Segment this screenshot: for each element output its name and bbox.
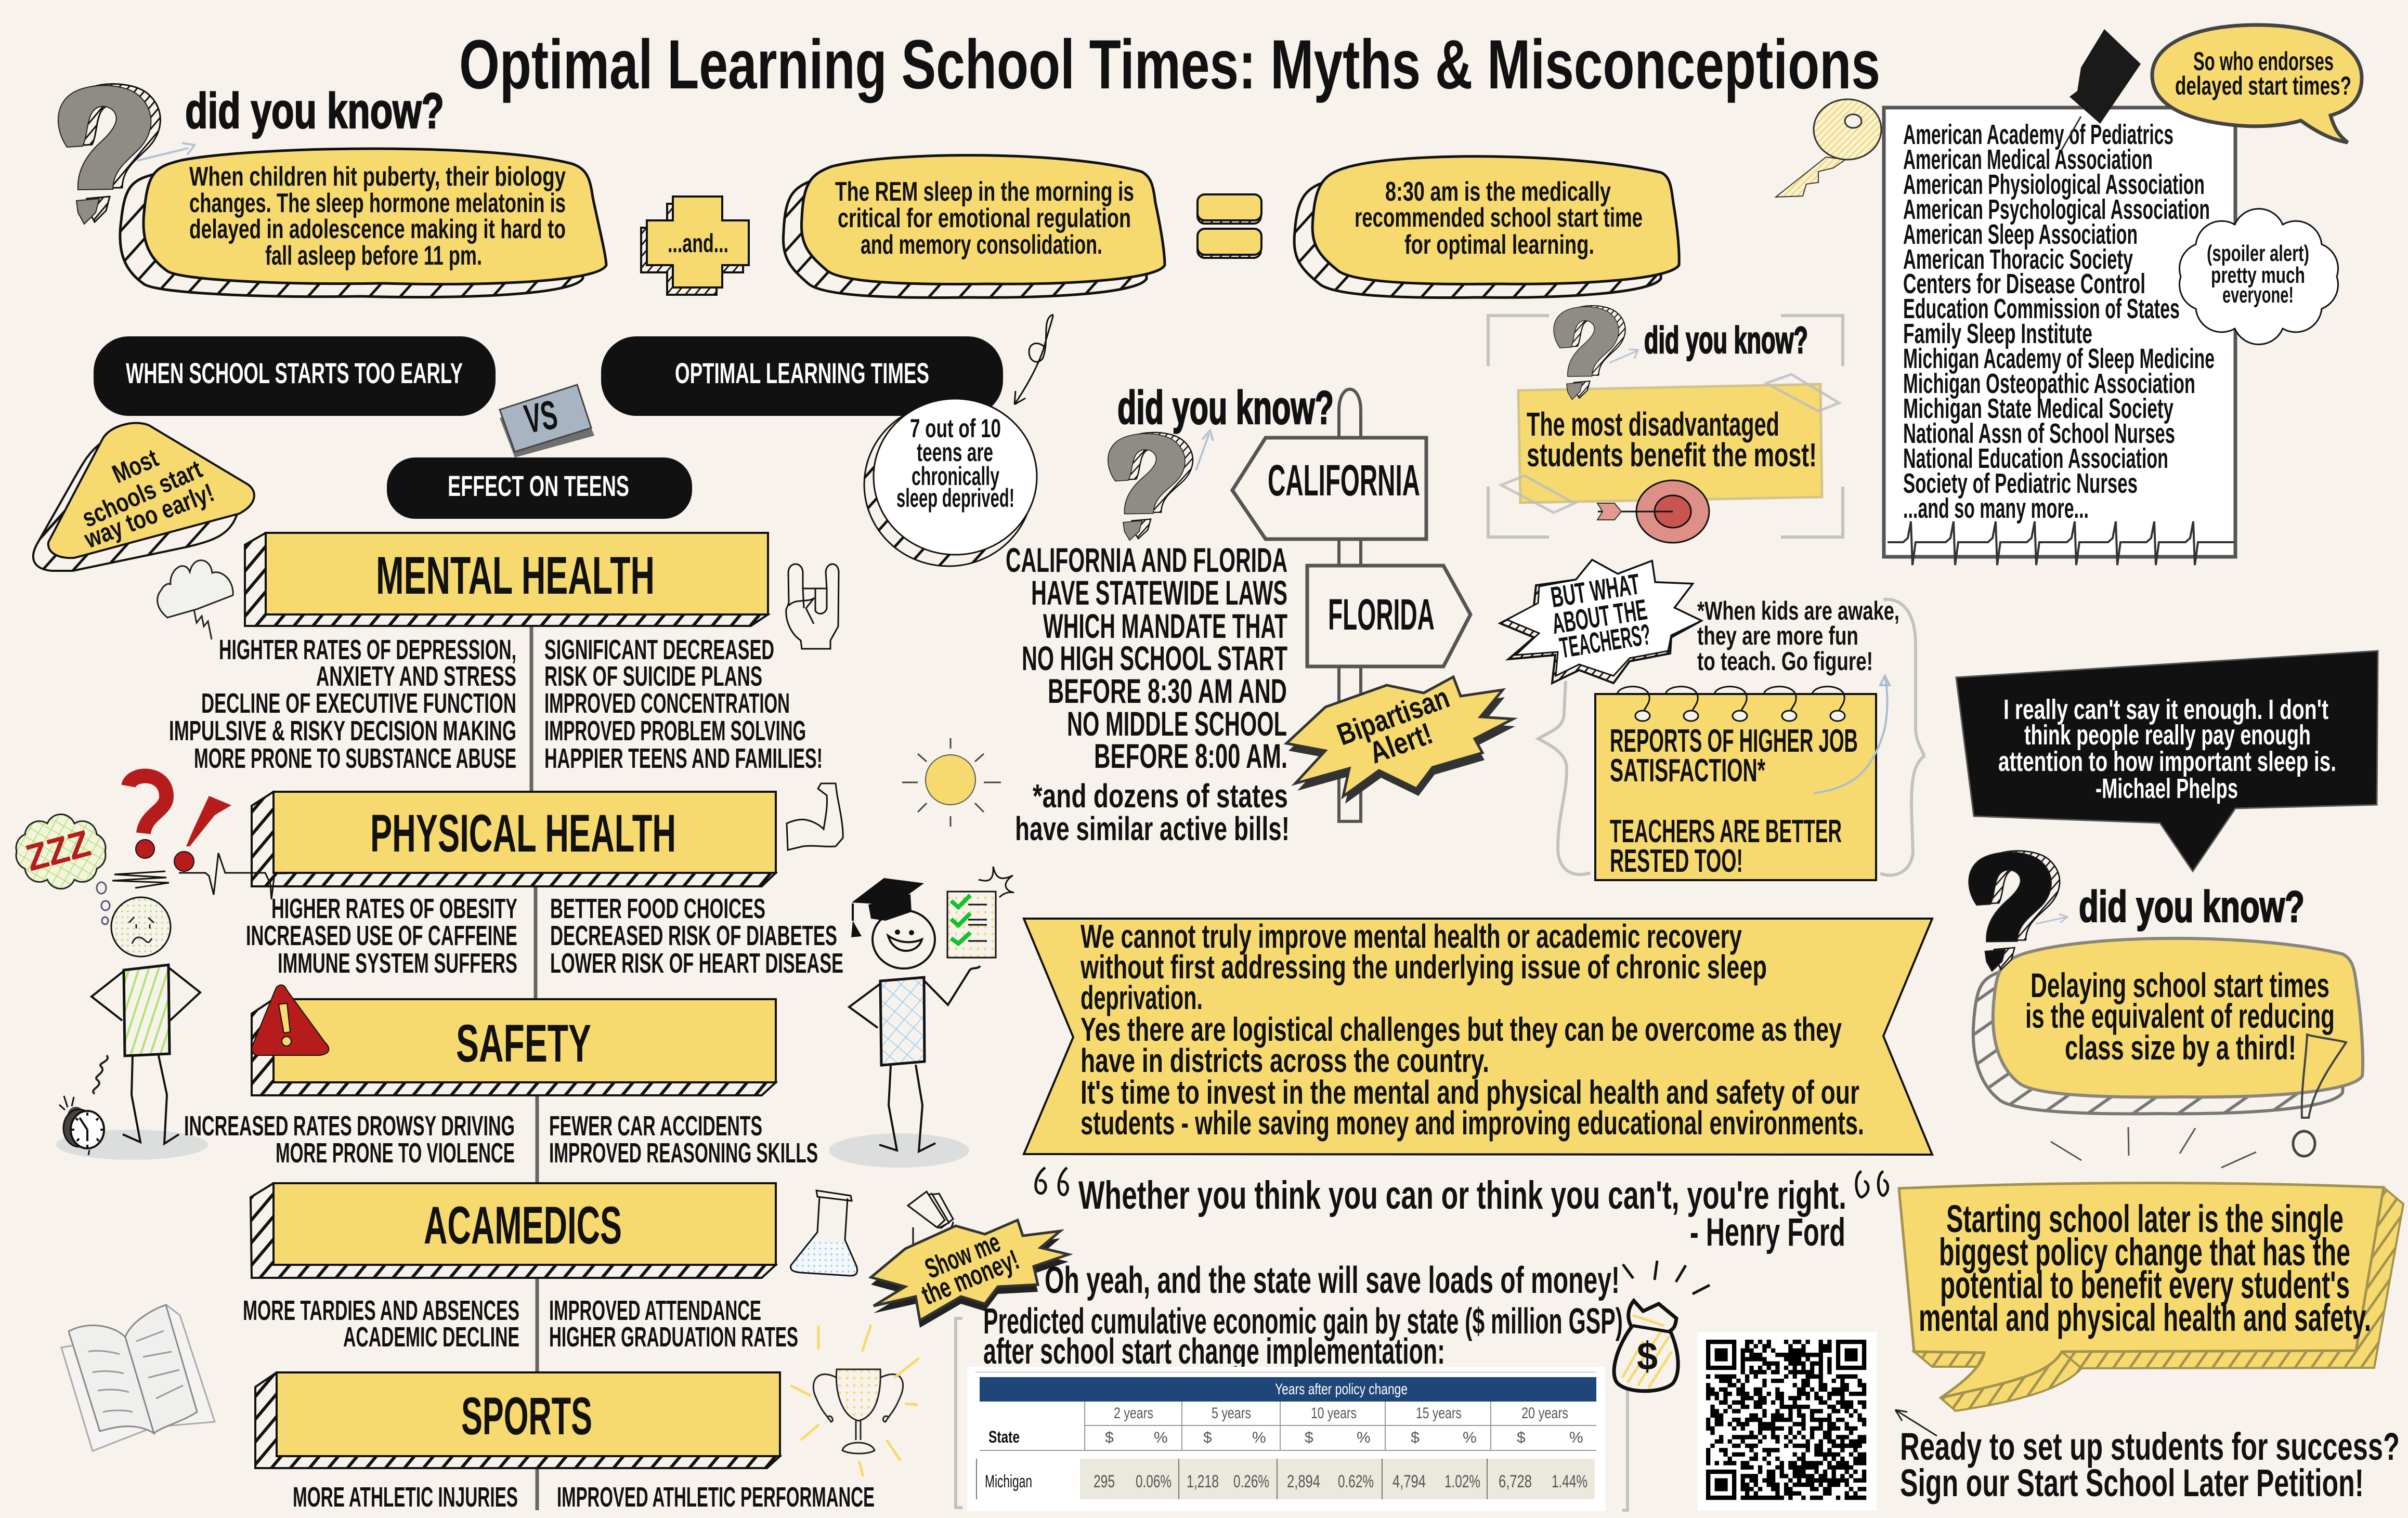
pill: when school starts too early: WHEN SCHOOL STARTS TOO EARLY [126, 357, 463, 389]
organization list: Family Sleep Institute [1903, 318, 2092, 349]
column headers: $ [1517, 1429, 1526, 1446]
icon: money bag: $ [1637, 1334, 1658, 1379]
section center lines [531, 618, 537, 1510]
rays [1623, 1261, 1710, 1294]
signpost: FLORIDA [1328, 590, 1435, 639]
section: safety [184, 985, 818, 1169]
sticky note [1518, 384, 1822, 503]
state laws text: NO HIGH SCHOOL START [1022, 639, 1287, 677]
footnote: *When kids are awake, [1697, 596, 1899, 625]
state laws text: NO MIDDLE SCHOOL [1067, 704, 1287, 743]
table frame brackets [956, 1318, 1628, 1510]
michigan row: 0.06% [1136, 1472, 1172, 1491]
optimal time effects: SIGNIFICANT DECREASED [544, 634, 774, 665]
label: ...and... [668, 229, 728, 258]
column headers: State [988, 1428, 1020, 1446]
quote: henry ford [1036, 1168, 1888, 1254]
icon: question mark [58, 84, 160, 224]
bubble text: and memory consolidation. [861, 230, 1102, 260]
panel: did you know class size [1969, 851, 2363, 1168]
rings [1617, 687, 1844, 716]
organization list: Education Commission of States [1903, 293, 2180, 324]
economic text: Predicted cumulative economic gain by state ($ million GSP) [983, 1301, 1623, 1341]
arrow [1196, 430, 1213, 470]
star sparkle [979, 867, 1014, 897]
QR code [1697, 1332, 1877, 1510]
organization list [1903, 119, 2215, 524]
closing marks [1856, 1171, 1888, 1197]
michigan row: 2,894 [1287, 1472, 1320, 1491]
column headers: $ [1411, 1429, 1420, 1446]
optimal time effects: IMPROVED PROBLEM SOLVING [544, 715, 806, 747]
table header [980, 1377, 1596, 1402]
opening marks [1036, 1168, 1068, 1195]
optimal time effects: IMPROVED REASONING SKILLS [549, 1137, 818, 1169]
section heading: SAFETY [456, 1014, 591, 1073]
callout: most schools start way too early [33, 423, 254, 571]
year labels: 5 years [1212, 1405, 1251, 1422]
head [873, 910, 935, 969]
column headers: % [1569, 1429, 1583, 1446]
optimal time effects: HIGHER GRADUATION RATES [549, 1321, 798, 1353]
icon: equals [1198, 194, 1261, 258]
panel: endorsement list [1884, 108, 2235, 565]
early start effects [184, 1110, 515, 1169]
early start effects: MORE ATHLETIC INJURIES [293, 1482, 518, 1513]
icon: zzz cloud: ZZZ [22, 822, 95, 880]
early start effects: ANXIETY AND STRESS [316, 661, 516, 692]
torso [880, 977, 925, 1065]
icon: target [1597, 480, 1709, 543]
economic text: Oh yeah, and the state will save loads of money! [1045, 1260, 1620, 1301]
early start effects [246, 893, 517, 979]
shadow [829, 1133, 969, 1168]
heading: did you know? [2079, 882, 2305, 931]
michigan row: 4,794 [1392, 1472, 1426, 1491]
heartbeat [1888, 521, 2234, 565]
icon: storm cloud [158, 560, 233, 639]
callout: show me the money: the money! [917, 1244, 1023, 1311]
quote: henry ford: Whether you think you can or think you can't, you're right. [1078, 1173, 1846, 1218]
section heading: ACAMEDICS [424, 1196, 622, 1255]
optimal time effects: FEWER CAR ACCIDENTS [549, 1110, 762, 1142]
banner: call to action: deprivation. [1081, 979, 1203, 1016]
footnote [1697, 596, 1899, 676]
badge: VS: VS [521, 391, 561, 442]
organization list: National Education Association [1903, 443, 2168, 474]
column headers: $ [1105, 1429, 1114, 1446]
title: Optimal Learning School Times: Myths & Misconceptions [459, 26, 1880, 103]
michigan row: 1,218 [1187, 1472, 1219, 1491]
section: physical health [246, 792, 843, 979]
column headers: $ [1305, 1429, 1313, 1446]
state laws text: have similar active bills! [1015, 810, 1290, 847]
organization list: Society of Pediatric Nurses [1903, 468, 2138, 499]
organization list: Michigan Academy of Sleep Medicine [1903, 343, 2215, 374]
organization list: National Assn of School Nurses [1903, 418, 2175, 449]
callout: show me the money [871, 1220, 1069, 1328]
early start effects: HIGHTER RATES OF DEPRESSION, [219, 634, 516, 665]
callout: 7 out of 10 circle: 7 out of 10 [910, 414, 1001, 443]
section: sports [255, 1372, 875, 1513]
pill: optimal learning times: OPTIMAL LEARNING TIMES [675, 357, 929, 389]
callout: 7 out of 10 circle [864, 399, 1037, 566]
early start effects [169, 634, 516, 774]
star: but what about the teachers: ABOUT THE [1550, 593, 1649, 640]
organization list: Centers for Disease Control [1903, 268, 2145, 299]
organization list: American Medical Association [1903, 144, 2153, 175]
icon: muscle arm [787, 783, 843, 850]
optimal time effects: LOWER RISK OF HEART DISEASE [550, 948, 843, 979]
bubble text: 8:30 am is the medically [1385, 177, 1611, 207]
column headers: % [1357, 1429, 1371, 1446]
organization list: American Thoracic Society [1903, 244, 2133, 275]
year labels: 10 years [1311, 1405, 1357, 1422]
state laws text: WHICH MANDATE THAT [1043, 607, 1287, 645]
optimal time effects: HAPPIER TEENS AND FAMILIES! [544, 743, 823, 774]
banner: call to action: students - while saving money and improving educational environments. [1081, 1104, 1864, 1142]
state laws text: HAVE STATEWIDE LAWS [1031, 573, 1287, 612]
icon: hand with money [908, 1192, 953, 1248]
notepad: SATISFACTION* [1610, 753, 1766, 789]
icon: question mark [1554, 306, 1625, 400]
panel: did you know california [1108, 382, 1334, 540]
column headers: % [1154, 1429, 1168, 1446]
arrow [1814, 676, 1890, 793]
limbs [92, 967, 200, 1144]
year labels: 20 years [1521, 1405, 1568, 1422]
column headers [988, 1428, 1583, 1446]
state laws text: BEFORE 8:30 AM AND [1048, 672, 1287, 710]
early start effects: DECLINE OF EXECUTIVE FUNCTION [201, 688, 516, 719]
icon: alarm clock [59, 1055, 108, 1155]
signpost [1232, 389, 1470, 821]
icon: rock hand [786, 564, 839, 649]
pole [1339, 389, 1361, 821]
early start effects [243, 1295, 519, 1353]
sign: florida [1307, 566, 1470, 666]
state laws text [1006, 541, 1290, 847]
cloud: spoiler alert: everyone! [2222, 282, 2294, 308]
section: academics [243, 1183, 798, 1353]
optimal time effects [544, 634, 823, 774]
cloud: spoiler alert: (spoiler alert) [2207, 241, 2309, 266]
early start effects: INCREASED RATES DROWSY DRIVING [184, 1110, 515, 1142]
panel: REM sleep bubble [783, 155, 1165, 298]
organization list: American Psychological Association [1903, 194, 2210, 225]
speech bubble: michael phelps quote [1956, 651, 2378, 871]
callout: most schools start way too early: schools start [77, 454, 206, 533]
arrow [137, 143, 194, 161]
michigan row: 1.44% [1552, 1472, 1587, 1491]
icon: red question mark [128, 776, 166, 858]
footnote: they are more fun [1697, 621, 1858, 650]
icon: exclamation [2051, 1035, 2346, 1168]
icon: red exclamation [174, 796, 231, 871]
banner: call to action: It's time to invest in the mental and physical health and safety of our [1081, 1074, 1859, 1111]
panel: disadvantaged students: students benefit the most! [1527, 436, 1817, 474]
banner: call to action: have in districts across the country. [1081, 1042, 1489, 1079]
callout: show me the money: Show me [920, 1226, 1005, 1285]
optimal time effects [550, 893, 843, 979]
tape [1766, 374, 1839, 411]
michigan row: 6,728 [1499, 1472, 1532, 1491]
panel: 8:30 am bubble [1294, 156, 1679, 298]
bubble text [189, 162, 566, 271]
notepad: REPORTS OF HIGHER JOB [1610, 723, 1858, 759]
pill: effect on teens [387, 457, 692, 519]
heading: did you know? [1117, 382, 1334, 434]
organization list: Michigan Osteopathic Association [1903, 368, 2195, 399]
speech bubble: starting school later [1899, 1183, 2403, 1411]
star: but what about the teachers: TEACHERS? [1557, 618, 1653, 664]
table: economic gain [967, 1367, 1605, 1511]
icon: question mark [1969, 851, 2060, 971]
optimal time effects [549, 1110, 818, 1169]
column headers: $ [1203, 1429, 1212, 1446]
callout: 7 out of 10 circle: sleep deprived! [896, 483, 1014, 513]
pill: when school starts too early [94, 336, 496, 416]
callout: 7 out of 10 circle: chronically [912, 462, 999, 491]
pill: effect on teens: EFFECT ON TEENS [448, 469, 629, 502]
state laws text: CALIFORNIA AND FLORIDA [1006, 541, 1287, 579]
banner: call to action: Yes there are logistical challenges but they can be overcome as they [1081, 1011, 1842, 1048]
optimal time effects [549, 1295, 798, 1353]
early start effects: MORE TARDIES AND ABSENCES [243, 1295, 519, 1326]
state laws text: *and dozens of states [1033, 777, 1288, 815]
organization list: American Sleep Association [1903, 219, 2138, 250]
economic text [983, 1260, 1623, 1371]
banner: call to action: without first addressing the underlying issue of chronic sleep [1080, 948, 1767, 986]
optimal time effects: BETTER FOOD CHOICES [550, 893, 765, 924]
economic text: after school start change implementation: [983, 1331, 1445, 1371]
icon: black pin [2062, 29, 2141, 150]
icon: open book [61, 1305, 215, 1451]
quote: henry ford: - Henry Ford [1690, 1210, 1845, 1254]
callout: bipartisan alert: Bipartisan [1333, 681, 1454, 752]
optimal time effects: IMPROVED CONCENTRATION [544, 688, 790, 719]
icon: money bag [1614, 1261, 1710, 1391]
arrow to QR [1895, 1410, 1937, 1436]
callout: most schools start way too early: way too early! [80, 478, 218, 554]
heading: did you know? [1644, 320, 1808, 361]
state laws text: BEFORE 8:00 AM. [1094, 737, 1287, 775]
cloud: spoiler alert: pretty much [2211, 263, 2305, 288]
michigan row [977, 1459, 1595, 1499]
notepad: TEACHERS ARE BETTER [1610, 814, 1842, 849]
organization list: ...and so many more... [1903, 493, 2089, 524]
icon: zzz cloud [16, 814, 110, 924]
early start effects: MORE PRONE TO SUBSTANCE ABUSE [194, 743, 516, 774]
callout: bipartisan alert [1286, 677, 1515, 804]
bubble text [1355, 177, 1643, 260]
text: The most disadvantaged [1527, 405, 1779, 443]
michigan row: 295 [1094, 1472, 1115, 1491]
organization list: American Physiological Association [1903, 169, 2205, 200]
icon: warning triangle [252, 985, 329, 1055]
table: economic gain: Years after policy change [1275, 1381, 1408, 1398]
panel: disadvantaged students [1488, 306, 1843, 543]
bubble text: for optimal learning. [1404, 230, 1594, 260]
torso [124, 965, 170, 1056]
early start effects: IMMUNE SYSTEM SUFFERS [278, 948, 517, 979]
callout: 7 out of 10 circle: teens are [917, 438, 993, 467]
icon: sun [902, 738, 1001, 827]
bubble text: The REM sleep in the morning is [835, 177, 1134, 207]
bubble text [835, 177, 1134, 260]
star: but what about the teachers [1500, 560, 1701, 683]
year labels: 15 years [1416, 1405, 1462, 1422]
star: but what about the teachers: BUT WHAT [1548, 567, 1642, 613]
figure: tired student [56, 897, 208, 1160]
badge: VS [500, 385, 594, 457]
callout: bipartisan alert: Alert! [1365, 716, 1437, 770]
year labels: 2 years [1114, 1405, 1153, 1422]
footnote: to teach. Go figure! [1697, 647, 1873, 676]
bubble shadow [1973, 955, 2343, 1114]
early start effects: IMPULSIVE & RISKY DECISION MAKING [169, 715, 516, 747]
bubble text: critical for emotional regulation [838, 203, 1131, 233]
section: mental health [169, 533, 823, 774]
callout: most schools start way too early: Most [108, 443, 163, 489]
figure: graduate student [829, 867, 1014, 1168]
notepad: RESTED TOO! [1610, 843, 1743, 879]
section heading: MENTAL HEALTH [376, 546, 655, 605]
early start effects: HIGHER RATES OF OBESITY [271, 893, 517, 924]
section heading: PHYSICAL HEALTH [370, 804, 676, 863]
panel: teachers [1500, 560, 1924, 880]
frame [1488, 316, 1843, 537]
scribble and heartbeat [112, 853, 287, 899]
head [111, 897, 171, 957]
speech bubble: michael phelps quote: -Michael Phelps [2095, 773, 2238, 804]
squiggle arrow to sleep deprived circle [1014, 315, 1053, 404]
optimal time effects: RISK OF SUICIDE PLANS [544, 661, 762, 692]
icon: question mark [1108, 433, 1193, 540]
speech bubble: who endorses [2152, 25, 2362, 142]
section heading: SPORTS [461, 1386, 592, 1446]
year labels [1114, 1405, 1568, 1422]
heading: did you know: did you know? [185, 83, 444, 139]
grid lines [980, 1402, 1596, 1450]
column headers: % [1252, 1429, 1266, 1446]
michigan row: 0.26% [1233, 1472, 1269, 1491]
bubble shadow [120, 162, 583, 297]
panel: plus and [641, 197, 749, 295]
bubble [1993, 938, 2363, 1097]
early start effects: ACADEMIC DECLINE [343, 1321, 519, 1353]
icon: trophy [790, 1325, 919, 1476]
bubble text: changes. The sleep hormone melatonin is [189, 188, 566, 218]
pill: optimal learning times [601, 336, 1003, 416]
optimal time effects: IMPROVED ATHLETIC PERFORMANCE [557, 1482, 875, 1513]
michigan row: 1.02% [1444, 1472, 1480, 1491]
optimal time effects: IMPROVED ATTENDANCE [549, 1295, 761, 1326]
arrow [2036, 914, 2067, 924]
cloud: spoiler alert [2180, 209, 2338, 344]
column headers: % [1463, 1429, 1477, 1446]
limbs [849, 966, 980, 1151]
petition call [1900, 1425, 2400, 1504]
braces [1538, 599, 1924, 875]
icon: flask [790, 1190, 857, 1276]
sign: california [1232, 438, 1426, 539]
bubble text: When children hit puberty, their biology [189, 162, 566, 192]
graduation cap [851, 878, 924, 937]
bubble [144, 149, 606, 284]
michigan row: 0.62% [1338, 1472, 1374, 1491]
early start effects: INCREASED USE OF CAFFEINE [246, 920, 517, 951]
speech bubble: who endorses: So who endorses [2193, 47, 2334, 76]
panel: did you know class size: class size by a third! [2065, 1028, 2296, 1067]
michigan row: Michigan [985, 1472, 1032, 1491]
banner: call to action [1024, 918, 1932, 1155]
organization list: American Academy of Pediatrics [1903, 119, 2173, 150]
arrow [1609, 349, 1638, 363]
early start effects: MORE PRONE TO VIOLENCE [276, 1137, 515, 1169]
signpost: CALIFORNIA [1268, 456, 1420, 505]
panel: did you know puberty [58, 83, 606, 297]
bubble text: recommended school start time [1355, 203, 1643, 233]
checklist [947, 892, 996, 958]
optimal time effects: DECREASED RISK OF DIABETES [550, 920, 837, 951]
icon: key [1776, 99, 1881, 197]
organization list: Michigan State Medical Society [1903, 393, 2173, 424]
shadow [56, 1130, 208, 1160]
bubble text: delayed in adolescence making it hard to [189, 214, 566, 244]
banner: call to action: We cannot truly improve mental health or academic recovery [1081, 918, 1742, 955]
notepad [1595, 687, 1876, 880]
bubble text: fall asleep before 11 pm. [265, 241, 482, 271]
